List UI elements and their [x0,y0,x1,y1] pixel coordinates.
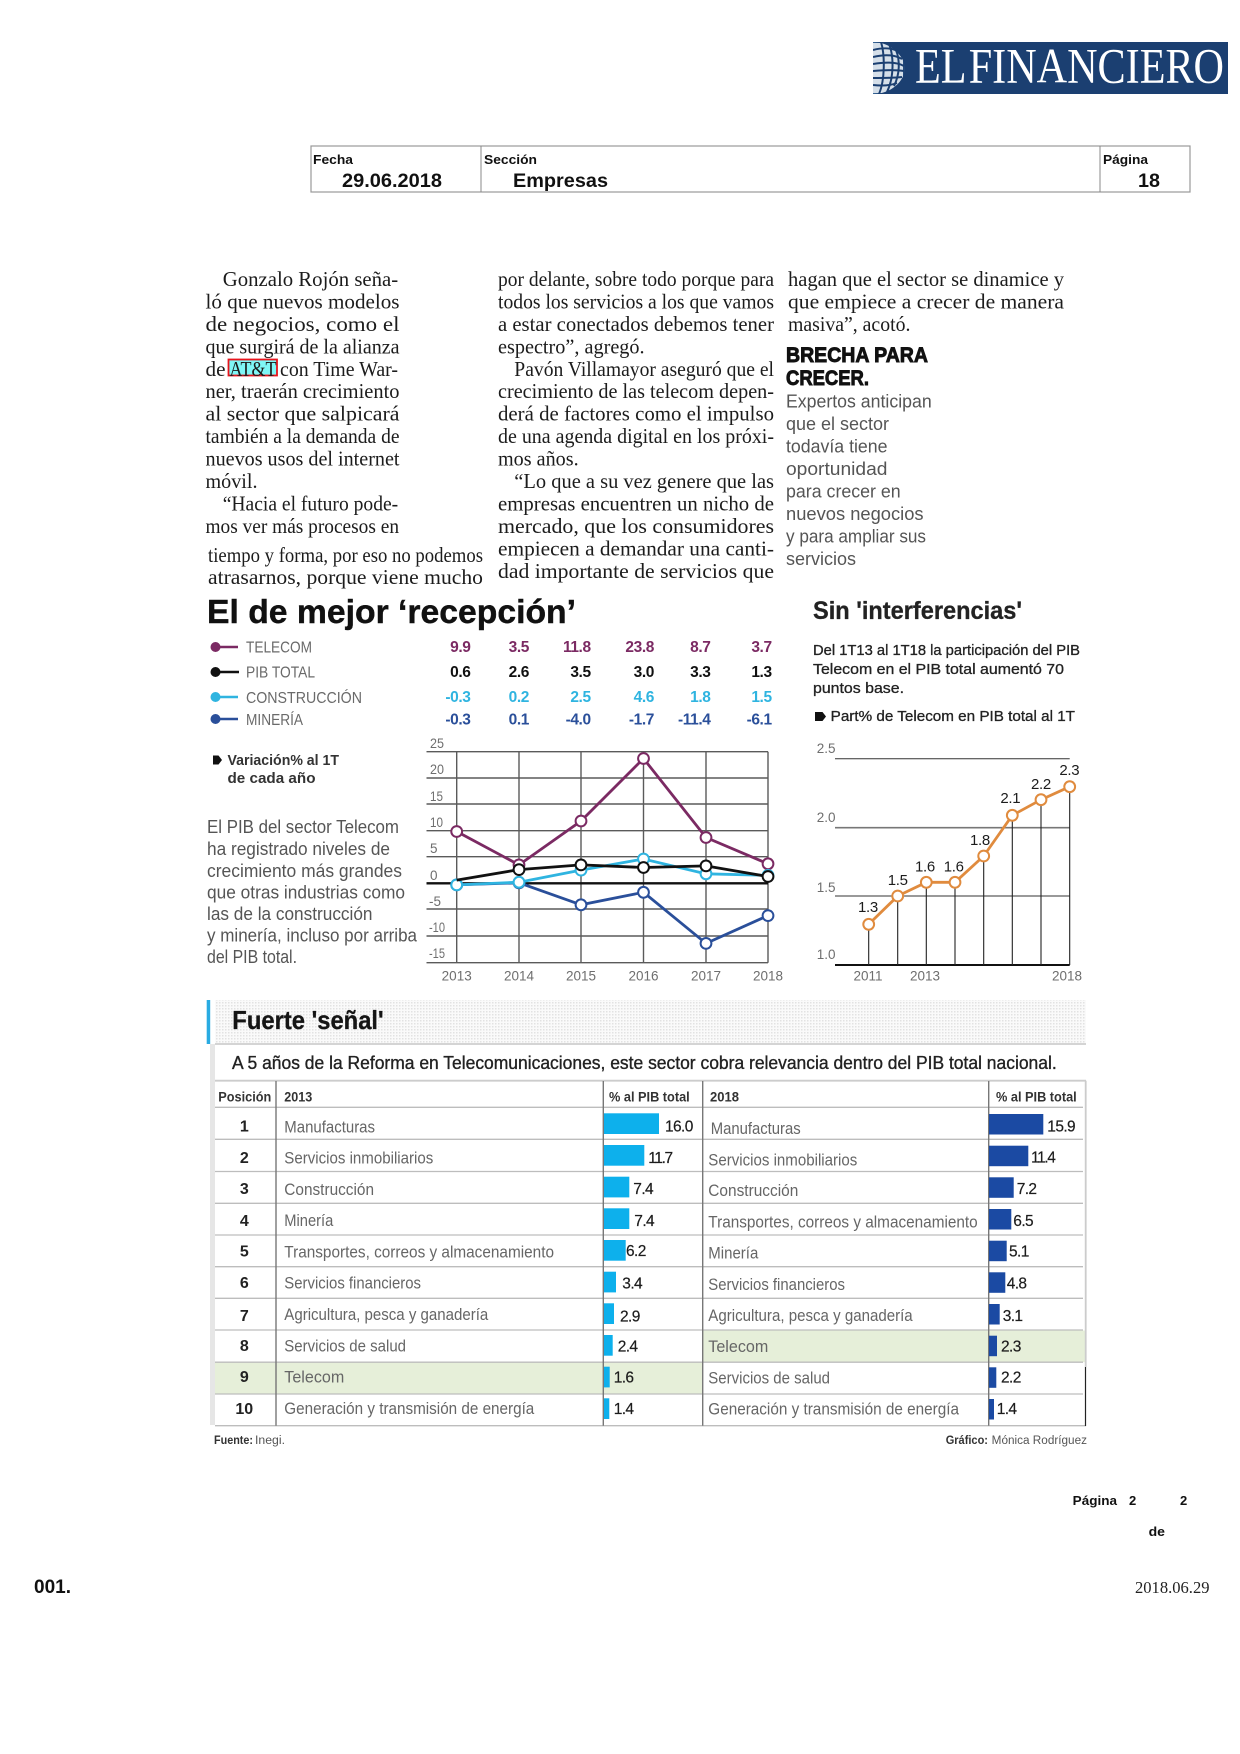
legend row: PIB total: 0.6 [450,664,471,681]
text: participación: puntos base. [813,681,904,697]
value labels: 2.2 [1031,776,1051,793]
legend row: Telecom: 9.9 [450,639,471,656]
x axis years: 2017 [691,969,721,984]
article column 2: empresas encuentren un nicho de [498,492,774,516]
2018 sector names: Servicios de salud [708,1369,830,1387]
2013 sector names: Servicios de salud [284,1338,406,1356]
legend row: Telecom [210,639,772,657]
text: participación [813,643,1080,697]
2018 sector names: Servicios inmobiliarios [708,1151,857,1169]
legend row: Minería: -0.3 [445,712,471,729]
heading: Brecha para crecer: BRECHA PARA [786,344,928,367]
article column 2: a estar conectados debemos tener [498,312,774,336]
legend row: PIB total [210,664,772,681]
paragraph: PIB Telecom: que otras industrias como [207,882,405,902]
2013 sector names: Generación y transmisión de energía [284,1400,535,1418]
line chart: variación anual: 15 [430,789,443,804]
article column 2: dad importante de servicios que [498,559,774,583]
x axis years: 2015 [566,969,596,984]
article column 3: hagan que el sector se dinamice y [788,267,1064,291]
header table: Sección [484,152,537,167]
legend row: Minería: MINERÍA [246,712,304,729]
2013 values: 3.4 [622,1275,643,1292]
graphic credit: Gráfico: [946,1435,988,1447]
footer: page number: 2 [1180,1493,1187,1508]
paragraph: PIB Telecom [207,817,418,967]
2013 values: 2.9 [620,1309,640,1326]
sidebar text: y para ampliar sus [786,526,926,546]
header band [207,1000,1086,1425]
paragraph: PIB Telecom: ha registrado niveles de [207,839,390,859]
table grid [215,1081,1086,1426]
article column 2: derá de factores como el impulso [498,402,774,426]
footer: code: 001. [34,1577,71,1598]
series: Telecom [451,753,773,870]
article column 1: ner, traerán crecimiento [206,379,400,403]
article column 2: mercado, que los consumidores [498,514,774,538]
note: Variación: de cada año [228,770,316,787]
2018 values: 2.3 [1001,1339,1021,1356]
position numbers [235,1119,253,1418]
2018 values [997,1118,1075,1418]
2013 values: 16.0 [665,1119,694,1136]
value labels: 2.3 [1059,762,1079,779]
2018 values: 1.4 [997,1401,1017,1418]
position numbers: 3 [240,1181,249,1198]
subtitle: A 5 años de la Reforma en Telecomunicaciones, este sector cobra relevancia dentro del PIB total nacional. [232,1053,1057,1073]
legend row: Telecom: 3.5 [509,639,530,656]
article column 2: por delante, sobre todo porque para [498,267,775,291]
article column 1: “Hacia el futuro pode- [223,492,398,516]
article column 1: nuevos usos del internet [206,447,400,471]
position numbers: 1 [240,1119,249,1136]
sidebar text: Expertos anticipan [786,392,932,412]
legend row: Telecom: TELECOM [246,640,312,657]
2013 sector names [284,1118,554,1418]
article column 1: al sector que salpicará [206,402,400,426]
2018 values: 6.5 [1013,1213,1033,1230]
sidebar text: todavía tiene [786,437,888,457]
legend row: Construcción: 0.2 [509,689,529,706]
legend row: Telecom: 11.8 [563,639,591,656]
sidebar text: nuevos negocios [786,504,924,524]
article column 1: mos ver más procesos en [206,514,399,538]
2013 sector names: Construcción [284,1181,374,1199]
legend row: Minería [210,712,772,729]
article column 1: móvil. [206,469,258,493]
x axis years: 2016 [628,969,659,984]
legend row: Construcción [210,689,772,707]
sidebar text [786,392,932,569]
2018 sector names: Generación y transmisión de energía [708,1400,960,1418]
graphic credit [946,1435,1087,1447]
line chart: variación anual: -10 [429,920,445,935]
text: participación: Del 1T13 al 1T18 la participación del PIB [813,643,1080,659]
header table: Fecha [313,152,354,167]
position numbers: 5 [240,1244,249,1261]
legend row: Telecom: 23.8 [625,639,655,656]
footer: page number: de [1149,1524,1165,1539]
footer: page number: 2 [1129,1493,1136,1508]
x axis years [853,969,1082,984]
source credit: Inegi. [255,1435,285,1447]
x axis years [442,969,783,984]
article column 1: ló que nuevos modelos [206,290,400,314]
note: Part% de Telecom: Part% de Telecom en PIB total al 1T [831,709,1075,725]
value labels: 1.8 [970,832,990,849]
header table [311,146,1190,192]
paragraph: PIB Telecom: del PIB total. [207,947,297,967]
2018 sector names: Construcción [708,1182,798,1200]
article column 2 [498,267,775,583]
paragraph: PIB Telecom: El PIB del sector Telecom [207,817,399,837]
value labels: 2.1 [1000,790,1020,807]
x axis years: 2018 [753,969,783,984]
header table: 29.06.2018 [342,171,442,192]
title: El de mejor recepción: El de mejor ‘recepción’ [207,593,576,630]
source credit: Fuente: [214,1435,253,1447]
legend row: PIB total: 3.0 [634,664,654,681]
legend row: Minería: -1.7 [629,712,654,729]
2018 sector names: Servicios financieros [708,1276,845,1294]
series: Minería [451,877,773,949]
article column 1: con Time War- [280,357,398,381]
2013 values: 2.4 [618,1339,638,1356]
2013 sector names: Manufacturas [284,1118,375,1136]
footer: page number: Página [1073,1493,1118,1508]
2018 sector names: Minería [708,1244,759,1262]
line chart: variación anual: 5 [430,841,438,856]
series: PIB total [457,860,773,882]
2018 sector names: Manufacturas [711,1120,801,1138]
x axis years: 2011 [853,969,883,984]
x axis years: 2018 [1052,969,1082,984]
highlight: AT&T: AT&T [230,357,277,381]
2013 sector names: Minería [284,1212,334,1230]
line chart: variación anual: -5 [429,894,441,909]
article column 2: mos años. [498,447,579,471]
article column 3: que empiece a crecer de manera [788,290,1065,314]
position numbers: 10 [235,1401,253,1418]
table headers: 2018 [710,1090,739,1105]
legend row: Construcción: 1.8 [690,689,711,706]
legend row: Minería: -4.0 [566,712,591,729]
heading: Brecha para crecer: CRECER. [786,367,869,390]
panel: Fuerte señal [207,1000,1087,1447]
table headers: 2013 [284,1090,313,1105]
2018 values: 3.1 [1003,1308,1022,1325]
line chart: participación en PIB [817,741,1082,984]
2013 bars [604,1113,659,1419]
2013 sector names: Servicios inmobiliarios [284,1149,433,1167]
line chart: participación en PIB: 1.5 [817,880,835,895]
footer: page number [1073,1493,1187,1539]
2018 values: 5.1 [1009,1244,1029,1261]
table headers [218,1090,1077,1105]
article column 2: Pavón Villamayor aseguró que el [514,357,774,381]
line chart: variación anual: 25 [430,736,444,751]
2018 bars [989,1114,1043,1420]
2013 values: 1.4 [614,1401,634,1418]
footer: date: 2018.06.29 [1135,1578,1210,1597]
value labels: 1.6 [944,859,964,876]
article column 1: de negocios, como el [206,312,400,336]
position numbers: 7 [240,1308,249,1325]
article column 2: crecimiento de las telecom depen- [498,379,774,403]
2018 values: 7.2 [1017,1181,1036,1198]
graphic credit: Mónica Rodríguez [992,1435,1087,1447]
2018 sector names: Transportes, correos y almacenamiento [708,1214,978,1232]
legend row: Minería: -6.1 [747,712,772,729]
sidebar text: para crecer en [786,482,901,502]
position numbers: 9 [240,1369,249,1386]
sidebar text: servicios [786,549,856,569]
value labels: 1.5 [888,872,908,889]
legend row: Minería: -11.4 [678,712,711,729]
legend row: PIB total: 3.3 [690,664,711,681]
2013 values: 7.4 [634,1213,655,1230]
2018 values: 2.2 [1001,1369,1021,1386]
line chart: participación en PIB: 2.0 [817,810,835,825]
position numbers: 4 [240,1213,249,1230]
legend row: PIB total: 2.6 [509,664,530,681]
table headers: Posición [218,1090,271,1105]
2013 sector names: Transportes, correos y almacenamiento [284,1243,554,1261]
2018 values: 11.4 [1031,1150,1056,1167]
2018 values: 15.9 [1047,1118,1075,1135]
header table: Página [1103,152,1149,167]
legend row: PIB total: PIB TOTAL [246,664,315,681]
article column 1: Gonzalo Rojón seña- [223,267,398,291]
article column 1: tiempo y forma, por eso no podemos [208,543,483,567]
value labels: 1.3 [858,899,878,916]
table headers: % al PIB total [996,1090,1077,1105]
2018 values: 4.8 [1007,1275,1026,1292]
article column 3 [788,267,1065,336]
heading: Sin interferencias: Sin 'interferencias' [813,597,1022,625]
line chart: variación anual [426,736,783,984]
2013 values [614,1119,694,1418]
article column 2: “Lo que a su vez genere que las [514,469,774,493]
sidebar text: oportunidad [786,459,888,479]
icon: globe [873,42,907,94]
value labels: 1.6 [915,859,935,876]
article column 3: masiva”, acotó. [788,312,910,336]
legend row: PIB total: 3.5 [570,664,591,681]
legend row: PIB total: 1.3 [751,664,772,681]
sidebar text: que el sector [786,414,889,434]
legend row: Construcción: 2.5 [570,689,591,706]
article column 2: todos los servicios a los que vamos [498,290,774,314]
paragraph: PIB Telecom: y minería, incluso por arriba [207,926,418,946]
line chart: participación en PIB: 1.0 [817,947,835,962]
legend row: Construcción: 4.6 [634,689,655,706]
table headers: % al PIB total [609,1090,690,1105]
legend row: Construcción: -0.3 [445,689,471,706]
2013 sector names: Servicios financieros [284,1274,421,1292]
value labels [858,762,1079,916]
2013 values: 1.6 [614,1370,633,1387]
x axis years: 2014 [504,969,535,984]
article column 1: atrasarnos, porque viene mucho [208,565,483,589]
article column 2: empiecen a demandar una canti- [498,536,774,560]
line chart: variación anual: 10 [430,815,443,830]
2013 values: 11.7 [648,1150,672,1167]
2018 sector names: Agricultura, pesca y ganadería [708,1307,913,1325]
header table: Empresas [513,171,608,192]
header band: Fuerte 'señal' [232,1005,384,1035]
heading: Brecha para crecer [786,344,928,390]
2013 sector names: Agricultura, pesca y ganadería [284,1306,489,1324]
line chart: variación anual: -15 [429,946,445,961]
header table: 18 [1138,171,1160,192]
highlight rows [215,1330,1086,1394]
note: Variación: Variación% al 1T [228,752,339,769]
article column 2: espectro”, agregó. [498,334,645,358]
legend row: Telecom: 8.7 [690,639,710,656]
2013 sector names: Telecom [284,1369,344,1387]
paragraph: PIB Telecom: crecimiento más grandes [207,861,402,881]
article column 1: también a la demanda de [206,424,400,448]
2013 values: 7.4 [633,1181,654,1198]
source credit [214,1435,285,1447]
article column 1 [206,267,483,589]
series: Telecom share [863,781,1075,930]
series: Construcción [451,854,773,890]
line chart: variación anual: 20 [430,762,444,777]
2013 values: 6.2 [626,1243,646,1260]
note: Variación [213,752,339,787]
legend row: Minería: 0.1 [509,712,530,729]
legend row: Construcción: 1.5 [751,689,772,706]
line chart: variación anual: 0 [430,868,438,883]
text: participación: Telecom en el PIB total aumentó 70 [813,662,1064,678]
legend row: Telecom: 3.7 [751,639,772,656]
x axis years: 2013 [442,969,472,984]
position numbers: 8 [240,1338,249,1355]
line chart: participación en PIB: 2.5 [817,741,835,756]
position numbers: 2 [240,1150,249,1167]
position numbers: 6 [240,1275,249,1292]
2018 sector names: Telecom [708,1338,768,1356]
article column 1: de [206,357,226,381]
article column 1: que surgirá de la alianza [206,334,400,358]
legend row: Construcción: CONSTRUCCIÓN [246,690,362,707]
article column 2: de una agenda digital en los próxi- [498,424,774,448]
legend and values table [210,639,772,729]
paragraph: PIB Telecom: las de la construcción [207,904,372,924]
2018 sector names [708,1120,978,1418]
x axis years: 2013 [910,969,940,984]
